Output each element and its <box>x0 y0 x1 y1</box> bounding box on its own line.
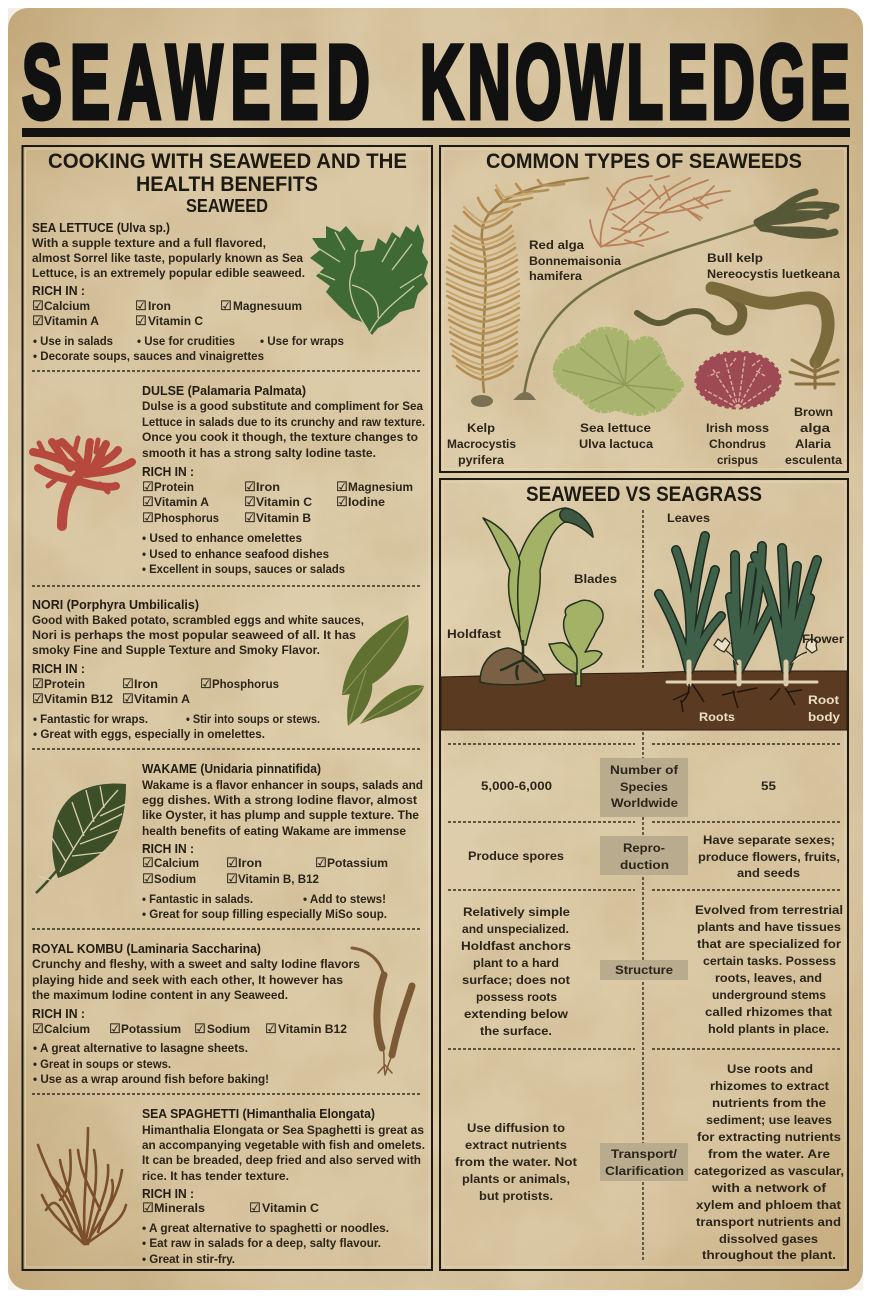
row: structure: underground stems <box>712 988 826 1002</box>
row: structure: called rhizomes that <box>705 1005 832 1019</box>
entry: dulse: ☑ <box>336 480 348 495</box>
label: sea lettuce: Sea lettuce <box>580 421 651 435</box>
row: structure: Holdfast anchors <box>461 939 571 953</box>
label: brown alga: esculenta <box>785 453 842 467</box>
heading: seaweed vs seagrass: SEAWEED VS SEAGRASS <box>526 483 762 506</box>
row: reproduction: and seeds <box>737 866 800 880</box>
label: irish moss: Irish moss <box>706 421 769 435</box>
label: kelp: Macrocystis <box>447 437 516 451</box>
entry: sea lettuce <box>32 221 428 363</box>
illustration: red alga <box>590 176 730 247</box>
title rule <box>22 128 850 137</box>
entry: dulse: Magnesium <box>348 480 413 494</box>
entry: sea lettuce: ☑ <box>135 299 147 314</box>
heading: cooking with seaweed: COOKING WITH SEAWEED AND THE <box>48 150 407 173</box>
entry: nori: • Fantastic for wraps. <box>33 712 148 726</box>
entry: nori: • Great with eggs, especially in omelettes. <box>33 727 265 741</box>
panel: cooking with seaweed <box>22 146 432 1270</box>
entry: sea spaghetti: • A great alternative to spaghetti or noodles. <box>142 1221 389 1235</box>
label box: reproduction <box>600 836 688 875</box>
entry: royal kombu: Sodium <box>207 1022 250 1036</box>
entry: sea lettuce: almost Sorrel like taste, popularly known as Sea <box>32 251 303 265</box>
entry: sea lettuce: Lettuce, is an extremely popular edible seaweed. <box>32 266 305 280</box>
row: transport: plants or animals, <box>462 1172 570 1186</box>
heading: cooking with seaweed <box>48 150 407 216</box>
illustration: kelp <box>447 178 588 407</box>
entry: sea lettuce: • Decorate soups, sauces and vinaigrettes <box>33 349 264 363</box>
label box: number of species: Species <box>620 780 668 794</box>
row: structure: Evolved from terrestrial <box>695 903 843 917</box>
row: structure: the surface. <box>480 1024 552 1038</box>
heading: common types: COMMON TYPES OF SEAWEEDS <box>486 150 802 173</box>
diagram labels: Root <box>808 693 839 707</box>
label box: number of species: Worldwide <box>611 796 678 810</box>
entry: sea spaghetti: ☑ <box>142 1201 154 1216</box>
entry: royal kombu <box>32 942 412 1086</box>
label: brown alga: alga <box>800 421 830 435</box>
entry: royal kombu: Potassium <box>121 1022 181 1036</box>
entry: dulse: Iodine <box>348 495 385 509</box>
entry: nori: smoky Fine and Supple Texture and Smoky Flavor. <box>32 643 320 657</box>
label: kelp: pyrifera <box>458 453 504 467</box>
illustration: brown alga <box>637 288 838 388</box>
diagram labels: Holdfast <box>447 627 501 641</box>
row: transport: for extracting nutrients <box>697 1130 841 1144</box>
row: transport: Use diffusion to <box>467 1121 565 1135</box>
entry: dulse: • Excellent in soups, sauces or salads <box>142 562 345 576</box>
label: irish moss <box>706 421 769 467</box>
entry: dulse: • Used to enhance seafood dishes <box>142 547 329 561</box>
entry: nori: • Stir into soups or stews. <box>186 712 320 726</box>
entry: wakame: Calcium <box>154 856 199 870</box>
row: transport: extract nutrients <box>465 1138 567 1152</box>
row: transport: transport nutrients and <box>696 1215 841 1229</box>
entry: wakame: Iron <box>238 856 262 870</box>
label: sea lettuce <box>579 421 653 451</box>
entry: sea lettuce: Magnesuum <box>233 299 302 313</box>
icon: sea lettuce <box>310 224 428 335</box>
label box: transport <box>600 1143 688 1181</box>
entry: nori: Protein <box>44 677 85 691</box>
row: transport: xylem and phloem that <box>696 1198 841 1212</box>
title: KNOWLEDGE <box>420 25 850 141</box>
entry: nori: NORI (Porphyra Umbilicalis) <box>32 598 199 612</box>
row: number of species <box>481 758 776 817</box>
label box: reproduction: duction <box>620 858 669 872</box>
entry: sea lettuce: ☑ <box>220 299 232 314</box>
entry: dulse: Vitamin C <box>256 495 312 509</box>
label: irish moss: crispus <box>717 453 758 467</box>
entry: dulse <box>33 384 425 576</box>
label: bull kelp: Nereocystis luetkeana <box>707 267 840 281</box>
panel: seaweed vs seagrass <box>440 479 848 1270</box>
diagram labels: body <box>808 710 840 724</box>
label: kelp: Kelp <box>467 421 495 435</box>
entry: wakame: • Fantastic in salads. <box>142 892 253 906</box>
label: sea lettuce: Ulva lactuca <box>579 437 653 451</box>
diagram labels <box>447 511 844 724</box>
entry: nori: Nori is perhaps the most popular seaweed of all. It has <box>32 628 356 642</box>
entry: dulse: Iron <box>256 480 280 494</box>
label: kelp <box>447 421 516 467</box>
diagram labels: Roots <box>699 710 735 724</box>
label box: structure <box>600 960 688 980</box>
entry: dulse: ☑ <box>244 480 256 495</box>
entry: sea spaghetti: Himanthalia Elongata or Sea Spaghetti is great as <box>142 1123 424 1137</box>
entry: nori: ☑ <box>32 692 44 707</box>
entry: dulse: ☑ <box>244 495 256 510</box>
row: transport: from the water. Not <box>455 1155 577 1169</box>
row: transport: with a network of <box>711 1181 827 1195</box>
entry: royal kombu: Vitamin B12 <box>278 1022 347 1036</box>
row: structure: extending below <box>464 1007 569 1021</box>
entry: sea spaghetti: rice. It has tender texture. <box>142 1169 289 1183</box>
entry: wakame: Wakame is a flavor enhancer in soups, salads and <box>142 778 423 792</box>
entry: wakame: • Great for soup filling especially MiSo soup. <box>142 907 387 921</box>
entry: sea lettuce: Vitamin A <box>44 314 99 328</box>
entry: sea lettuce: Calcium <box>44 299 90 313</box>
entry: royal kombu: • Use as a wrap around fish before baking! <box>33 1072 269 1086</box>
entry: royal kombu: ROYAL KOMBU (Laminaria Saccharina) <box>32 942 261 956</box>
row: structure: Relatively simple <box>463 905 570 919</box>
label box: reproduction: Repro- <box>623 841 665 855</box>
label box: number of species: Number of <box>610 763 679 777</box>
label: brown alga <box>785 405 842 467</box>
entry: royal kombu: ☑ <box>265 1022 277 1037</box>
entry: royal kombu: ☑ <box>109 1022 121 1037</box>
label box: structure: Structure <box>615 963 673 977</box>
entry: sea spaghetti: Minerals <box>154 1201 205 1215</box>
entry: sea spaghetti: It can be breaded, deep fried and also served with <box>142 1153 421 1167</box>
entry: dulse: Protein <box>154 480 194 494</box>
entry: dulse: ☑ <box>336 495 348 510</box>
entry: royal kombu: RICH IN : <box>32 1007 85 1021</box>
entry: nori: Phosphorus <box>212 677 279 691</box>
entry: dulse: Vitamin A <box>154 495 209 509</box>
entry: dulse: Lettuce in salads due to its crunchy and raw texture. <box>142 415 425 429</box>
entry: sea spaghetti: Vitamin C <box>262 1201 319 1215</box>
entry: nori: RICH IN : <box>32 662 85 676</box>
entry: sea spaghetti: • Eat raw in salads for a deep, salty flavour. <box>142 1236 381 1250</box>
entry: sea lettuce: • Use for crudities <box>137 334 235 348</box>
entry: sea lettuce: • Use in salads <box>33 334 113 348</box>
entry: wakame: ☑ <box>226 872 238 887</box>
entry: wakame: like Oyster, it has plump and supple texture. The <box>142 808 419 822</box>
row: transport: nutrients from the <box>712 1096 826 1110</box>
entry: royal kombu: the maximum Iodine content in any Seaweed. <box>32 988 288 1002</box>
entry: sea lettuce: SEA LETTUCE (Ulva sp.) <box>32 221 170 235</box>
title: SEAWEED <box>22 25 370 141</box>
illustration: bull kelp <box>518 192 836 398</box>
row: structure: and unspecialized. <box>462 922 569 936</box>
label: brown alga: Brown <box>794 405 833 419</box>
entry: royal kombu: playing hide and seek with each other, It however has <box>32 973 343 987</box>
entry: wakame: WAKAME (Unidaria pinnatifida) <box>142 762 321 776</box>
row: number of species: 55 <box>761 779 776 793</box>
row: reproduction: produce flowers, fruits, <box>698 850 840 864</box>
entry: nori: ☑ <box>122 677 134 692</box>
entry: dulse: ☑ <box>244 511 256 526</box>
icon: sea spaghetti <box>38 1128 126 1244</box>
entry: nori <box>32 598 424 741</box>
label: red alga: hamifera <box>529 269 582 283</box>
entry: wakame: RICH IN : <box>142 842 194 856</box>
row: transport: but protists. <box>479 1189 553 1203</box>
label: irish moss: Chondrus <box>709 437 766 451</box>
entry: wakame: • Add to stews! <box>303 892 386 906</box>
entry: nori: ☑ <box>200 677 212 692</box>
entry: sea spaghetti: ☑ <box>249 1201 261 1216</box>
entry: nori: ☑ <box>122 692 134 707</box>
row: reproduction <box>468 833 840 880</box>
row: reproduction: Have separate sexes; <box>703 833 835 847</box>
illustration: sea lettuce <box>555 329 681 413</box>
entry: wakame: Sodium <box>154 872 196 886</box>
row: structure: roots, leaves, and <box>715 971 822 985</box>
row: structure: possess roots <box>476 990 557 1004</box>
row: transport: categorized as vascular, <box>694 1164 844 1178</box>
entry: nori: ☑ <box>32 677 44 692</box>
row: transport: sediment; use leaves <box>706 1113 832 1127</box>
row: transport: throughout the plant. <box>702 1248 836 1262</box>
entry: dulse: RICH IN : <box>142 465 194 479</box>
label: red alga: Red alga <box>529 238 584 252</box>
label box: transport: Clarification <box>605 1164 684 1178</box>
entry: sea lettuce: ☑ <box>32 314 44 329</box>
entry: dulse: smooth it has a strong salty Iodine taste. <box>142 446 376 460</box>
entry: wakame: health benefits of eating Wakame are immense <box>142 824 406 838</box>
entry: dulse: ☑ <box>142 480 154 495</box>
row: transport: Use roots and <box>727 1062 813 1076</box>
entry: royal kombu: Calcium <box>44 1022 90 1036</box>
entry: royal kombu: • Great in soups or stews. <box>33 1057 171 1071</box>
row: reproduction: Produce spores <box>468 849 564 863</box>
icon: nori <box>342 615 424 726</box>
entry: dulse: ☑ <box>142 495 154 510</box>
label box: number of species <box>600 758 688 817</box>
label box: transport: Transport/ <box>611 1147 678 1161</box>
label: brown alga: Alaria <box>795 437 831 451</box>
entry: nori: Vitamin A <box>134 692 190 706</box>
row: structure: hold plants in place. <box>708 1022 829 1036</box>
entry: royal kombu: Crunchy and fleshy, with a sweet and salty Iodine flavors <box>32 957 360 971</box>
icon: royal kombu <box>352 948 412 1075</box>
entry: sea lettuce: RICH IN : <box>32 284 85 298</box>
illustration: small seaweed <box>549 600 603 686</box>
entry: dulse: Phosphorus <box>154 511 219 525</box>
entry: wakame: ☑ <box>226 856 238 871</box>
diagram: ground cross-section <box>441 671 847 730</box>
entry: royal kombu: ☑ <box>194 1022 206 1037</box>
row: structure: plant to a hard <box>473 956 559 970</box>
entry: nori: Good with Baked potato, scrambled eggs and white sauces, <box>32 613 364 627</box>
row: transport: from the water. Are <box>708 1147 830 1161</box>
entry: sea lettuce: ☑ <box>32 299 44 314</box>
entry: sea lettuce: With a supple texture and a full flavored, <box>32 236 266 250</box>
icon: flowers <box>714 638 817 665</box>
entry: sea lettuce: Iron <box>148 299 171 313</box>
entry: sea spaghetti: RICH IN : <box>142 1187 194 1201</box>
illustration: seagrass plants <box>659 536 817 684</box>
icon: wakame <box>36 784 126 893</box>
label: red alga <box>529 238 621 283</box>
entry: wakame <box>36 762 423 921</box>
label: red alga: Bonnemaisonia <box>529 254 621 268</box>
illustration: irish moss <box>696 352 780 408</box>
heading: cooking with seaweed: HEALTH BENEFITS <box>136 173 318 196</box>
row: structure: that are specialized for <box>697 937 841 951</box>
entry: wakame: ☑ <box>315 856 327 871</box>
entry: dulse: • Used to enhance omelettes <box>142 531 302 545</box>
entry: wakame: ☑ <box>142 872 154 887</box>
entry: wakame: ☑ <box>142 856 154 871</box>
entry: wakame: egg dishes. With a strong Iodine flavor, almost <box>142 793 417 807</box>
entry: dulse: ☑ <box>142 511 154 526</box>
diagram labels: Leaves <box>667 511 710 525</box>
illustration: seaweed plant <box>480 508 593 685</box>
entry: dulse: Dulse is a good substitute and compliment for Sea <box>142 399 423 413</box>
entry: dulse: Vitamin B <box>256 511 311 525</box>
row: transport: dissolved gases <box>719 1232 818 1246</box>
entry: sea spaghetti <box>38 1107 425 1266</box>
diagram labels: Flower <box>802 632 844 646</box>
row: structure: plants and have tissues <box>697 920 841 934</box>
entry: royal kombu: • A great alternative to lasagne sheets. <box>33 1041 248 1055</box>
heading: cooking with seaweed: SEAWEED <box>186 196 268 216</box>
entry: sea spaghetti: SEA SPAGHETTI (Himanthalia Elongata) <box>142 1107 375 1121</box>
row: structure <box>461 903 843 1038</box>
entry: sea spaghetti: an accompanying vegetable with fish and omelets. <box>142 1138 425 1152</box>
entry: sea lettuce: • Use for wraps <box>260 334 344 348</box>
entry: sea lettuce: ☑ <box>135 314 147 329</box>
panel: common types of seaweeds <box>440 146 848 472</box>
icon: dulse <box>33 438 132 526</box>
row: number of species: 5,000-6,000 <box>481 779 552 793</box>
entry: sea lettuce: Vitamin C <box>148 314 203 328</box>
entry: royal kombu: ☑ <box>32 1022 44 1037</box>
entry: wakame: Potassium <box>327 856 388 870</box>
row: structure: surface; does not <box>462 973 570 987</box>
entry: wakame: Vitamin B, B12 <box>238 872 319 886</box>
row: structure: certain tasks. Possess <box>703 954 836 968</box>
entry: sea spaghetti: • Great in stir-fry. <box>142 1252 235 1266</box>
label: bull kelp <box>707 251 840 281</box>
diagram labels: Blades <box>574 572 617 586</box>
illustration: seagrass roots <box>673 684 802 712</box>
label: bull kelp: Bull kelp <box>707 251 763 265</box>
row: transport: rhizomes to extract <box>710 1079 829 1093</box>
entry: dulse: Once you cook it though, the texture changes to <box>142 430 418 444</box>
entry: nori: Iron <box>134 677 158 691</box>
entry: dulse: DULSE (Palamaria Palmata) <box>142 384 306 398</box>
row: transport <box>455 1062 844 1262</box>
title <box>22 25 850 141</box>
entry: nori: Vitamin B12 <box>44 692 113 706</box>
